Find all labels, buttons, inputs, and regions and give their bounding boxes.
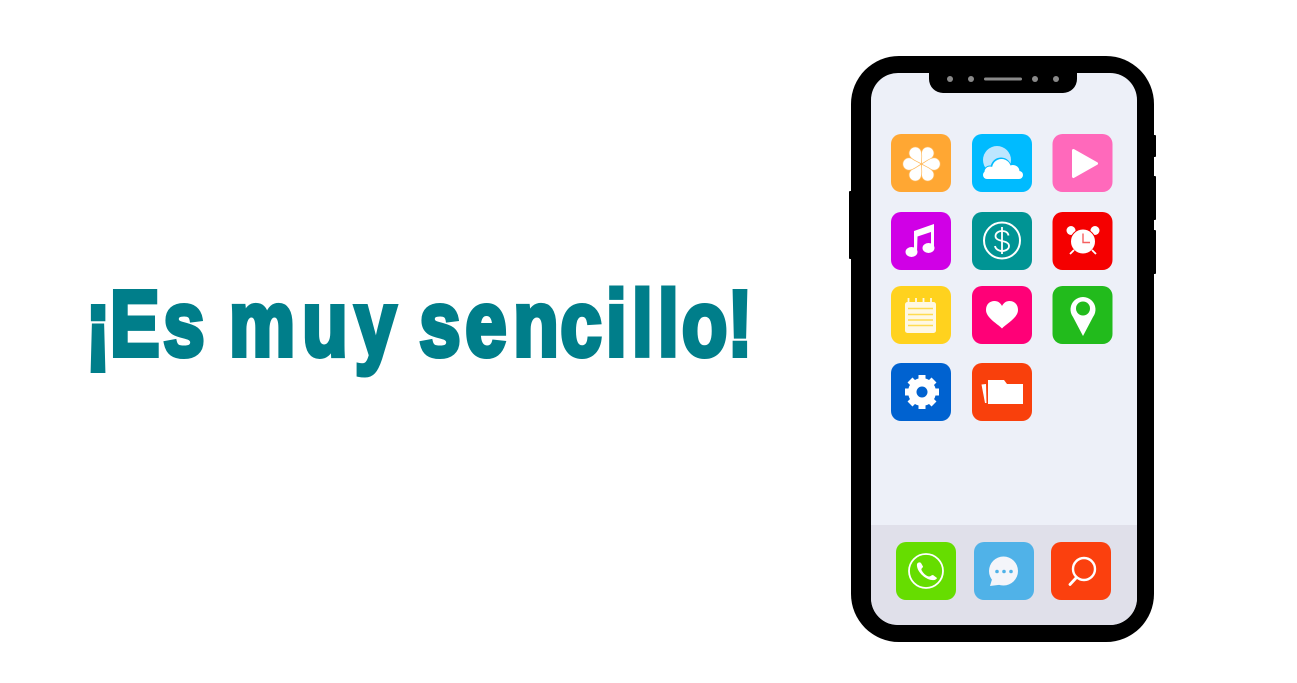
icon: folder (972, 363, 1032, 421)
icon: play (1052, 134, 1112, 192)
icon: whatsapp (896, 542, 956, 600)
icon: photos (891, 134, 951, 192)
icon: music (891, 212, 951, 270)
icon: messages (974, 542, 1034, 600)
icon: map pin (1052, 286, 1112, 344)
icon: heart (972, 286, 1032, 344)
title: ¡Es muy sencillo! (86, 272, 752, 375)
side buttons (849, 135, 1156, 274)
notch (929, 73, 1077, 93)
icon: weather (972, 134, 1032, 192)
icon: money (972, 212, 1032, 270)
phone body (851, 56, 1154, 642)
phone (849, 56, 1156, 642)
icon: search (1051, 542, 1111, 600)
screen (871, 73, 1137, 625)
icon: alarm clock (1052, 212, 1112, 270)
icon: notes (891, 286, 951, 344)
icon: settings (891, 363, 951, 421)
dock (871, 525, 1137, 625)
